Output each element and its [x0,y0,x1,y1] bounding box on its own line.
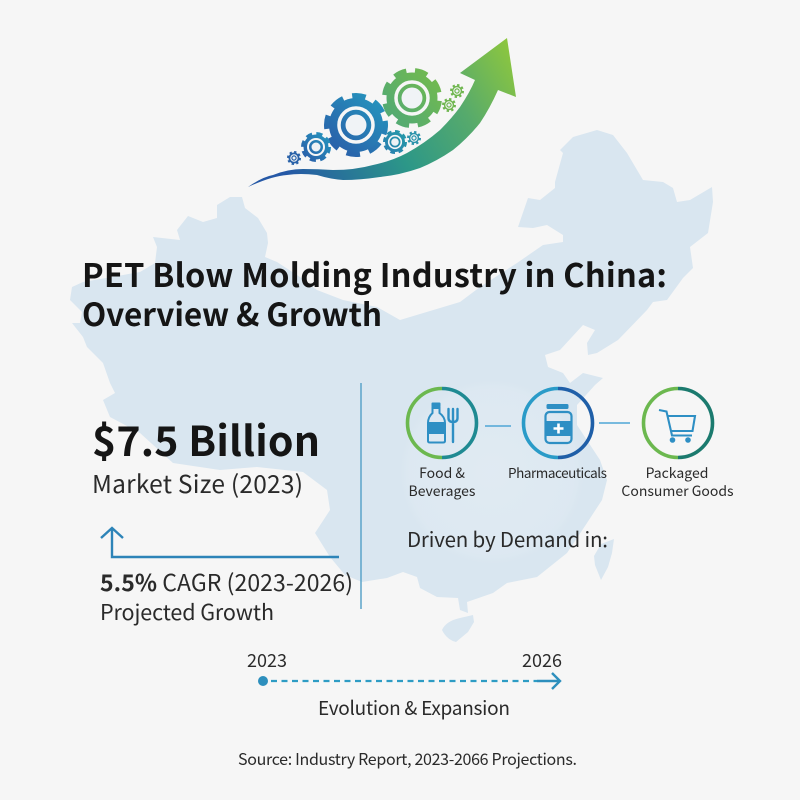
panel: market size [92,408,320,501]
gear: teal [384,132,406,152]
gear: medium blue [303,134,329,160]
label: packaged consumer goods: Packaged [646,463,708,483]
panel: demand sectors [407,388,734,553]
connector 1 [485,425,511,427]
label: food and beverages: Food & [419,463,465,483]
timeline end year: 2026 [522,647,562,673]
map of China [70,130,713,642]
CAGR label: Projected Growth [100,596,274,627]
gear: tiny green top [451,85,463,97]
timeline caption: Evolution & Expansion [318,694,510,721]
gear: tiny green bottom [443,99,455,111]
connector 2 [599,422,630,424]
gear: large blue [324,93,388,157]
source note: Source: Industry Report, 2023-2066 Projections. [238,746,577,770]
growth arrow [248,38,516,187]
timeline start year: 2023 [247,647,287,673]
title: PET Blow Molding Industry in China: [82,250,667,297]
timeline arrow [537,673,560,689]
gear: tiny blue [288,152,300,164]
driven by demand heading: Driven by Demand in: [407,523,608,553]
gear: tiny teal [408,132,420,144]
title [82,250,667,336]
label: food and beverages: Beverages [409,481,476,501]
CAGR value: 5.5% CAGR (2023-2026) [100,564,353,598]
timeline dashed line [271,680,537,682]
gear: large green [383,69,441,127]
panel: CAGR growth [100,528,353,627]
label: pharmaceuticals: Pharmaceuticals [508,462,607,482]
vertical divider [360,383,362,609]
icon: pharmaceuticals [524,388,593,458]
label: food and beverages [409,463,476,501]
icon: gears [288,69,463,164]
market size value: $7.5 Billion [92,408,320,468]
timeline [247,647,562,721]
label: packaged consumer goods [621,463,734,501]
icon: packaged consumer goods [644,388,712,458]
market size label: Market Size (2023) [92,466,303,501]
title: Overview & Growth [82,290,382,336]
icon: food and beverages [408,388,476,458]
label: packaged consumer goods: Consumer Goods [621,481,734,501]
timeline start dot [258,676,268,686]
icon: growth arrow [101,528,339,557]
